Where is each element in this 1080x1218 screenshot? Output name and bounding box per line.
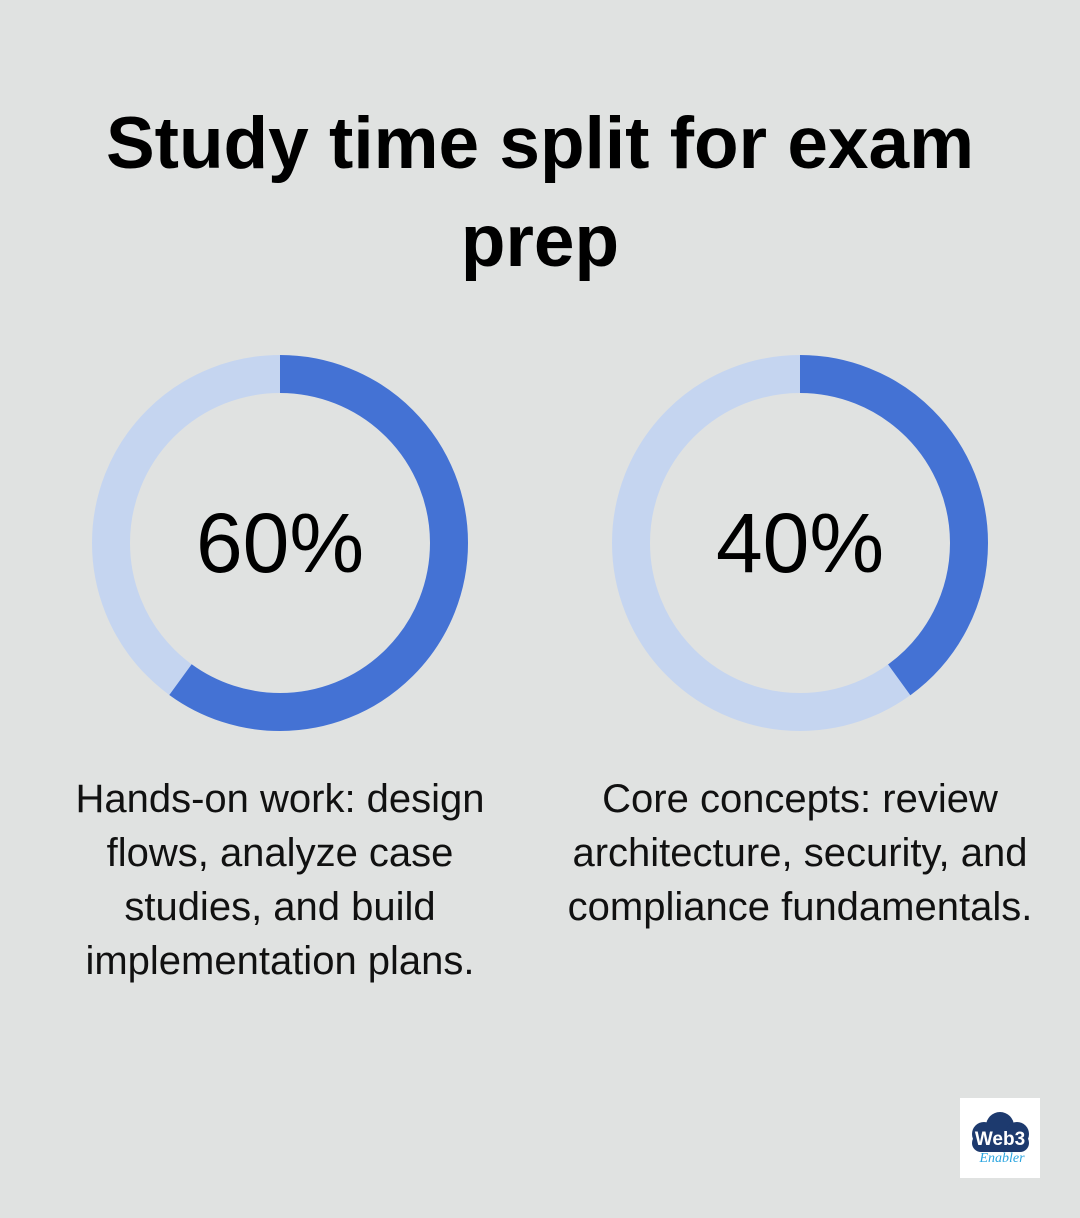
donut: 40%: 40% xyxy=(716,496,884,590)
logo: Web3 Enabler: Web3 xyxy=(975,1129,1025,1150)
donut: 40% xyxy=(612,355,988,731)
logo: Web3 Enabler xyxy=(960,1098,1040,1178)
donut: 60%: 60% xyxy=(196,496,364,590)
title: prep xyxy=(461,201,619,282)
title: Study time split for exam xyxy=(106,103,974,184)
title xyxy=(106,103,974,282)
text: core concepts: Core concepts: review architecture, security, and compliance fundamentals. xyxy=(568,777,1032,929)
text: hands-on work: Hands-on work: design flows, analyze case studies, and build implementation plans. xyxy=(75,777,485,983)
logo: Web3 Enabler: Enabler xyxy=(978,1151,1025,1166)
donut: 60% xyxy=(92,355,468,731)
